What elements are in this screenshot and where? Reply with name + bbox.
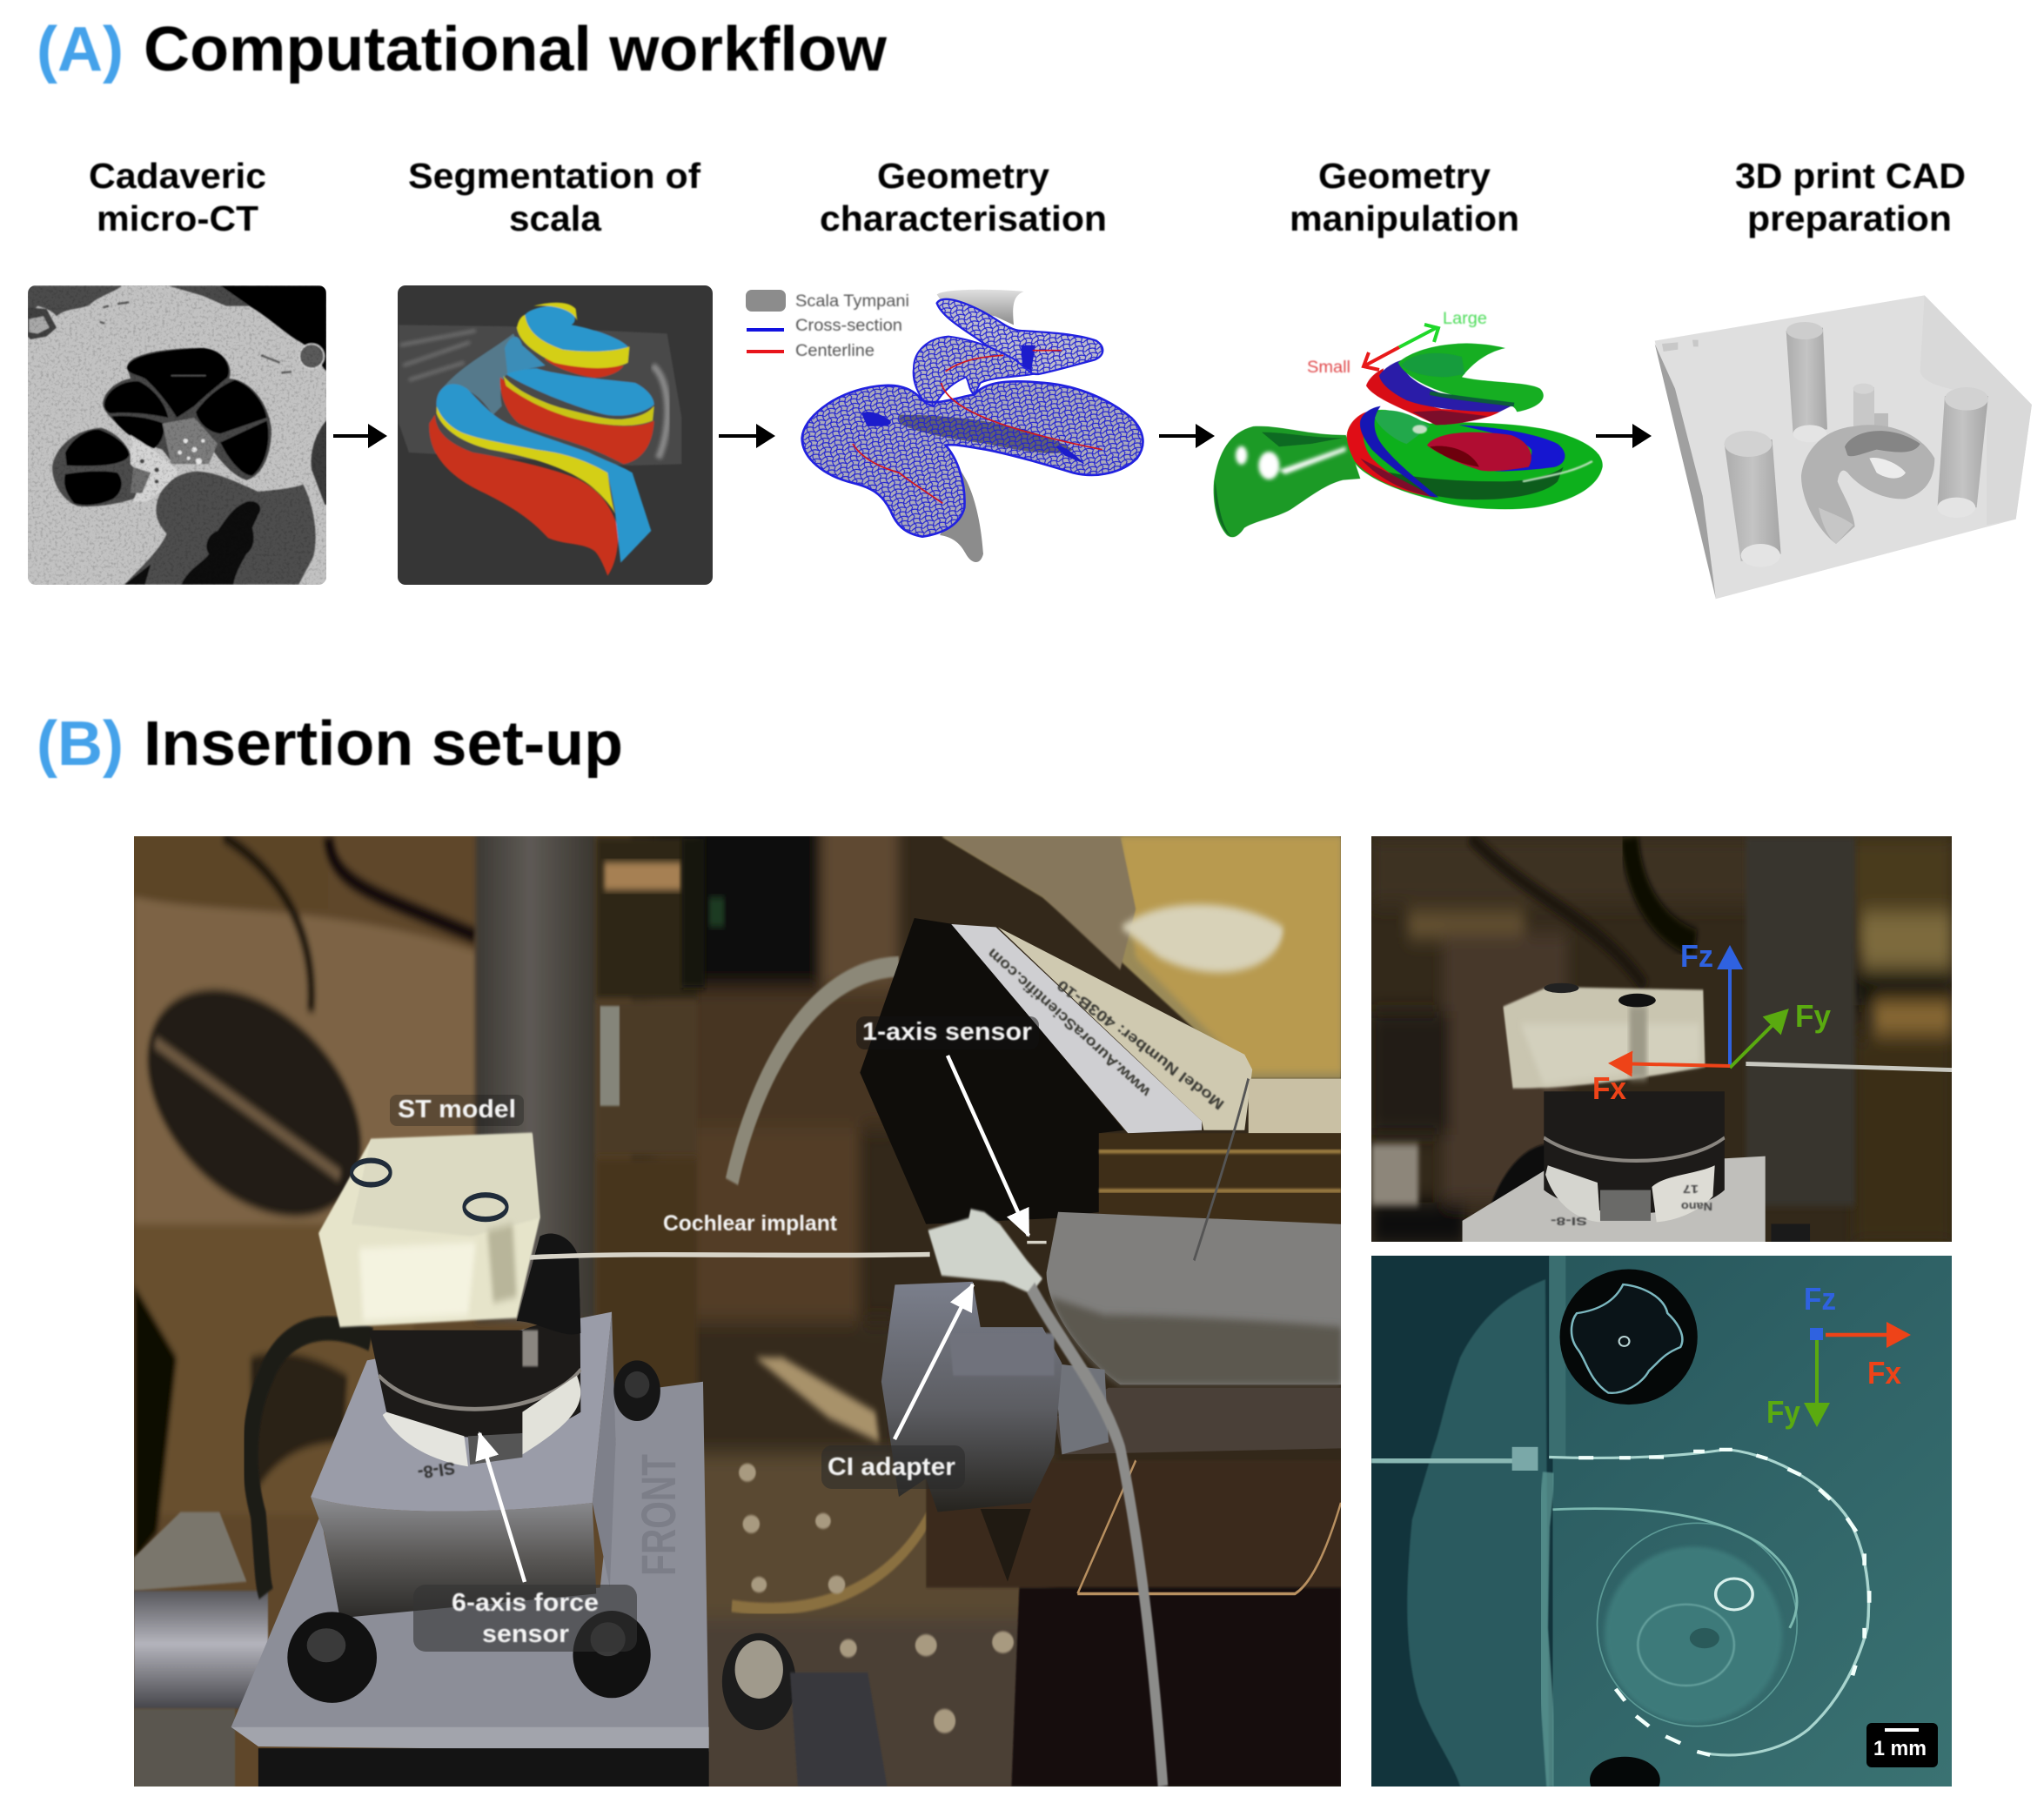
electrode cable (1031, 1288, 1163, 1787)
acrylic shield (942, 836, 1341, 1079)
arrow: segmentation to characterisation (719, 424, 775, 448)
step title: Geometry characterisation: characterisation (820, 198, 1107, 238)
implant wire (530, 1255, 930, 1257)
step title: 3D print CAD preparation: 3D print CAD (1735, 156, 1966, 196)
panel: cadaveric micro-CT scan (28, 285, 328, 585)
lower turn (429, 415, 618, 576)
legend: scala tympani, cross-section, centerline (746, 290, 909, 360)
step title: Geometry manipulation: Geometry (1318, 156, 1491, 196)
top-view force axes: Fz: Fz (1804, 1281, 1836, 1317)
upside-down sensor plate text: www.AuroraScientific.com (984, 945, 1155, 1101)
sensor label text: SI-8- (416, 1458, 456, 1482)
step title: Geometry characterisation: Geometry (877, 156, 1049, 196)
panel: side view with force axes: Nano (1681, 1200, 1712, 1213)
legend: scala tympani, cross-section, centerline: Cross-section (795, 317, 902, 335)
panel: main insertion set-up photograph (126, 812, 1342, 1800)
black bolts (287, 1612, 377, 1703)
legend: scala tympani, cross-section, centerline: Centerline (795, 342, 875, 360)
heading: A Computational workflow: (A) (37, 15, 124, 84)
panel: geometry characterisation wireframe (746, 290, 1143, 562)
scale bar: 1 mm (1866, 1723, 1938, 1767)
heading: B Insertion set-up: Insertion set-up (144, 709, 623, 779)
panel: side view with force axes (1371, 836, 1952, 1245)
step title: Geometry characterisation (820, 156, 1107, 238)
grey clamp block (1047, 1212, 1341, 1384)
pole (476, 830, 596, 1321)
panel: scala segmentation render (398, 285, 713, 585)
panel: side view with force axes: SI-8- (1551, 1215, 1587, 1228)
left half of photograph (126, 824, 725, 1793)
heading: A Computational workflow: Computational workflow (144, 15, 888, 84)
panel: side view with force axes: 17 (1683, 1183, 1699, 1196)
label background: CI adapter (821, 1445, 965, 1489)
arrow: characterisation to manipulation (1159, 424, 1215, 448)
arrow: manipulation to CAD (1596, 424, 1652, 448)
photo labels (398, 1018, 1032, 1648)
micrometer (134, 1512, 246, 1591)
heading: B Insertion set-up: (B) (37, 709, 124, 779)
printed block (593, 1312, 616, 1588)
force axes: Fy (1730, 998, 1831, 1068)
step title: 3D print CAD preparation (1735, 156, 1966, 238)
right half of photograph (530, 836, 1342, 1787)
panel: top view of implant inside model (1371, 1256, 1952, 1804)
force axes: Fx (1592, 1063, 1730, 1106)
label background: ST model (390, 1095, 524, 1126)
force axes: Fy: Fy (1795, 998, 1831, 1034)
top-view force axes: Fy (1766, 1340, 1817, 1430)
top-view force axes: Fx: Fx (1867, 1355, 1901, 1391)
label: Small: Small (1307, 359, 1350, 377)
lower structure (925, 1462, 1063, 1589)
ST model cube (318, 1133, 539, 1327)
spiral rings (1605, 1547, 1782, 1723)
step title: 3D print CAD preparation: preparation (1747, 198, 1952, 238)
printed base plate (231, 1382, 709, 1746)
step title: Geometry manipulation (1290, 156, 1519, 238)
force sensor cylinder (369, 1297, 580, 1438)
step title: Cadaveric micro-CT: Cadaveric (89, 156, 266, 196)
step title: Geometry manipulation: manipulation (1290, 198, 1519, 238)
FRONT mark on base: FRONT (631, 1454, 686, 1576)
legend: scala tympani, cross-section, centerline: Scala Tympani (795, 292, 909, 311)
arrow: CI adapter (895, 1284, 973, 1439)
top-view force axes: Fz (1804, 1281, 1836, 1340)
force axes: Fz: Fz (1680, 938, 1713, 974)
step title: Segmentation of scala: Segmentation of (408, 156, 700, 196)
step title: Segmentation of scala (408, 156, 700, 238)
top-view force axes: Fx (1826, 1335, 1907, 1391)
step title: Segmentation of scala: scala (509, 198, 602, 238)
wireframe cochlea model (802, 290, 1143, 562)
black sensor housing (860, 918, 1124, 1224)
panel: 3D print CAD block (1655, 295, 2032, 599)
arrow: CT to segmentation (333, 424, 387, 448)
panel: geometry manipulation model (1214, 310, 1603, 537)
label background: 6-axis force sensor (413, 1585, 637, 1652)
size arrows: small to large (1364, 325, 1438, 370)
arrow: 6-axis force sensor (479, 1433, 525, 1582)
label: Large: Large (1443, 310, 1487, 328)
middle turn (500, 377, 654, 464)
pegboard dots (739, 1464, 1014, 1733)
step titles (89, 156, 1966, 238)
step title: Cadaveric micro-CT: micro-CT (97, 198, 258, 238)
label: CI adapter: CI adapter (828, 1453, 955, 1481)
top-view force axes: Fy: Fy (1766, 1394, 1800, 1430)
sensor cable (251, 1329, 371, 1594)
arrow: 1-axis sensor (948, 1056, 1029, 1236)
upside-down sensor plate text (984, 945, 1227, 1113)
upside-down sensor plate text: Model Number: 403B-10 (1054, 976, 1227, 1113)
label: 6-axis force sensor: sensor (482, 1620, 569, 1648)
label: 6-axis force sensor (452, 1589, 599, 1648)
right half background of photograph (654, 812, 1050, 1800)
label: ST model: ST model (398, 1096, 516, 1123)
label background: 1-axis sensor (856, 1016, 1039, 1049)
CI adapter piece (928, 1209, 1042, 1294)
electrode wire and contacts (1371, 1458, 1516, 1463)
step title: Cadaveric micro-CT (89, 156, 266, 238)
adapter base block (881, 1282, 1062, 1512)
label: 6-axis force sensor: 6-axis force (452, 1589, 599, 1617)
background cable (732, 967, 899, 1182)
top turn (546, 357, 624, 378)
force axes: Fx: Fx (1592, 1070, 1626, 1106)
screw (1560, 1270, 1698, 1404)
label: Cochlear implant: Cochlear implant (663, 1211, 838, 1236)
label: 1-axis sensor: 1-axis sensor (862, 1018, 1032, 1046)
scale bar: 1 mm: 1 mm (1873, 1737, 1927, 1760)
hex bolt (722, 1633, 796, 1730)
